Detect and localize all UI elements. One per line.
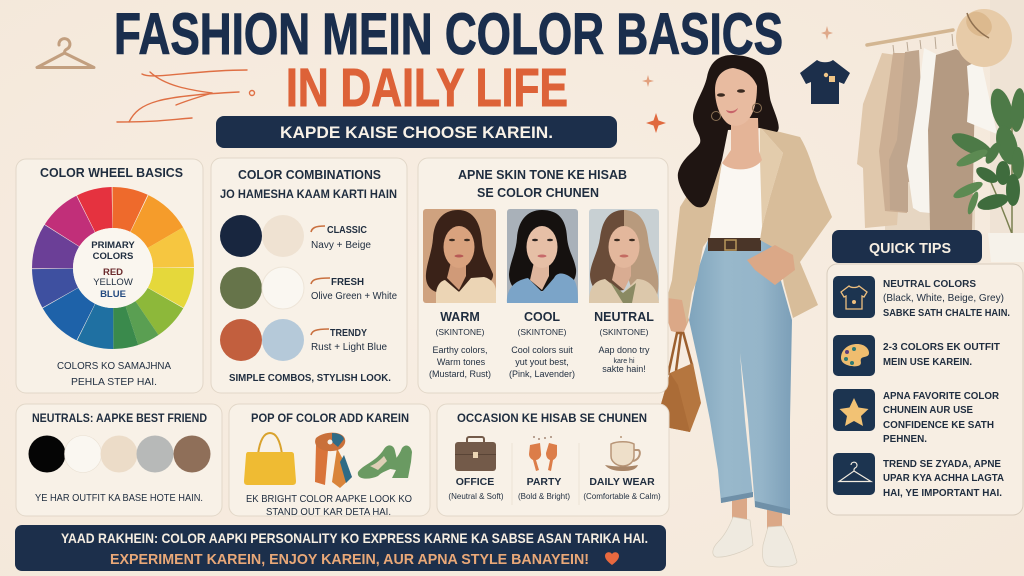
heading: SE COLOR CHUNEN (477, 185, 599, 200)
tip 3 (833, 389, 999, 445)
icon: navy t-shirt (800, 60, 850, 104)
text: cool: COOL (524, 310, 560, 324)
ankles (732, 498, 782, 532)
text: cool: yut yout best, (515, 357, 569, 367)
caption: COLORS KO SAMAJHNA (57, 360, 171, 372)
caption: PEHLA STEP HAI. (71, 376, 157, 388)
portrait: warm (423, 209, 496, 303)
labels: party: PARTY (527, 476, 561, 488)
labels: office: OFFICE (456, 476, 494, 488)
text: warm: (SKINTONE) (436, 327, 485, 337)
panel: neutrals (16, 404, 222, 516)
swatches: trendy: Rust + Light Blue (311, 342, 387, 353)
heading: JO HAMESHA KAAM KARTI HAIN (220, 187, 397, 201)
text: cool: (Pink, Lavender) (509, 369, 575, 379)
shoes (713, 517, 797, 567)
quick tips heading (832, 230, 982, 263)
swatches: fresh: FRESH (331, 276, 364, 288)
neutral swatches (28, 436, 210, 472)
tip 3: CONFIDENCE KE SATH (883, 419, 994, 431)
tip 2: MEIN USE KAREIN. (883, 356, 972, 368)
wheel centre label (73, 228, 153, 308)
bottom banner (15, 525, 666, 571)
caption: YE HAR OUTFIT KA BASE HOTE HAIN. (35, 493, 203, 504)
tip 1 (833, 276, 1010, 319)
white top (710, 160, 763, 238)
tip 1: (Black, White, Beige, Grey) (883, 292, 1004, 304)
text: neutral (594, 310, 654, 374)
swatches: trendy: TRENDY (330, 327, 367, 339)
text: neutral: Aap dono try (598, 345, 650, 355)
text: warm: (Mustard, Rust) (429, 369, 491, 379)
bottom banner: YAAD RAKHEIN: COLOR AAPKI PERSONALITY KO EXPRESS KARNE KA SABSE ASAN TARIKA HAI. (61, 530, 648, 546)
title (114, 2, 783, 118)
tip 1: NEUTRAL COLORS (883, 278, 976, 290)
neck (722, 118, 762, 169)
wheel centre label: PRIMARY (91, 240, 135, 251)
subtitle banner (216, 116, 617, 148)
icon: patterned scarf (315, 433, 352, 488)
wheel centre label: COLORS (93, 251, 133, 262)
text: neutral: (SKINTONE) (600, 327, 649, 337)
eyes and smile (717, 89, 745, 113)
heading: COLOR COMBINATIONS (238, 168, 381, 182)
title: FASHION MEIN COLOR BASICS (114, 2, 783, 67)
wheel centre label: RED (103, 267, 123, 278)
bottom banner: EXPERIMENT KAREIN, ENJOY KAREIN, AUR APNA STYLE BANAYEIN! (110, 551, 589, 568)
icon: heart (605, 552, 619, 565)
swatches: classic: Navy + Beige (311, 240, 371, 251)
earrings (712, 104, 762, 120)
panel: skin tone (418, 158, 668, 393)
text: warm: Warm tones (437, 357, 486, 367)
tip 2: 2-3 COLORS EK OUTFIT (883, 341, 1001, 353)
swatches: trendy (220, 319, 387, 361)
heading: APNE SKIN TONE KE HISAB (458, 167, 627, 182)
tip 4: TREND SE ZYADA, APNE (883, 458, 1001, 470)
icon: orange swoosh lines (117, 70, 254, 122)
heading (220, 168, 397, 201)
labels: daily wear: (Comfortable & Calm) (583, 492, 661, 501)
heading: COLOR WHEEL BASICS (40, 165, 183, 180)
icon: briefcase (455, 437, 496, 471)
blazer right (760, 127, 832, 318)
wheel centre label: BLUE (100, 289, 126, 300)
labels: party: (Bold & Bright) (518, 492, 570, 501)
illustration: potted plant (949, 86, 1024, 262)
heading: OCCASION KE HISAB SE CHUNEN (457, 411, 647, 425)
icon: coffee cup (605, 436, 640, 471)
text: neutral: sakte hain! (602, 364, 646, 374)
panel: color wheel basics (16, 159, 203, 393)
face (715, 68, 757, 126)
subtitle banner: KAPDE KAISE CHOOSE KAREIN. (280, 123, 553, 142)
bag (655, 332, 701, 432)
tip 1: SABKE SATH CHALTE HAIN. (883, 307, 1010, 319)
tip 4 (833, 453, 1004, 499)
panel: quick tips (827, 264, 1023, 515)
tip 3: PEHNEN. (883, 433, 927, 445)
chart: color wheel (52, 208, 174, 328)
quick tips heading: QUICK TIPS (869, 240, 951, 257)
right hand (747, 245, 795, 285)
text: warm (429, 310, 491, 379)
blazer left (667, 163, 722, 325)
wheel centre label: YELLOW (93, 277, 133, 288)
labels: daily wear: DAILY WEAR (589, 476, 655, 488)
illustration: woman in beige blazer and jeans (655, 55, 832, 567)
illustration: clothing rack (857, 30, 997, 232)
jeans (689, 240, 792, 515)
title: IN DAILY LIFE (286, 58, 568, 118)
belt (708, 238, 761, 251)
panel: occasion (437, 404, 669, 516)
icon: green heels (358, 445, 412, 479)
icon: champagne glasses (529, 436, 557, 471)
heading: POP OF COLOR ADD KAREIN (251, 411, 409, 425)
heading: NEUTRALS: AAPKE BEST FRIEND (32, 411, 207, 425)
labels: office (448, 476, 504, 501)
text: neutral: NEUTRAL (594, 310, 654, 324)
tip 3: CHUNEIN AUR USE (883, 404, 973, 416)
text: cool (509, 310, 575, 379)
caption: SIMPLE COMBOS, STYLISH LOOK. (229, 372, 391, 384)
portrait: cool (507, 209, 578, 303)
text: warm: Earthy colors, (432, 345, 488, 355)
tip 2 (833, 335, 1001, 376)
labels: office: (Neutral & Soft) (448, 492, 504, 501)
panel: color combinations (211, 158, 407, 393)
caption: STAND OUT KAR DETA HAI. (266, 507, 391, 518)
tip 4: UPAR KYA ACHHA LAGTA (883, 472, 1004, 484)
tip 3: APNA FAVORITE COLOR (883, 390, 999, 402)
portrait: neutral (589, 209, 659, 303)
icon: straw hat (956, 7, 1012, 67)
hair (678, 55, 779, 207)
tip 4: HAI, YE IMPORTANT HAI. (883, 487, 1002, 499)
swatches: classic: CLASSIC (327, 224, 367, 236)
panel: pop of color (229, 404, 430, 518)
icon: yellow handbag (244, 433, 296, 485)
labels: party (518, 476, 570, 501)
caption (57, 360, 171, 388)
caption (246, 494, 412, 518)
swatches: fresh (220, 267, 397, 309)
text: warm: WARM (440, 310, 480, 324)
heading (458, 167, 627, 200)
swatches: classic (220, 215, 371, 257)
text: neutral: kare hi (613, 358, 635, 365)
icon: hanger (37, 39, 94, 68)
swatches: fresh: Olive Green + White (311, 291, 397, 302)
text: cool: (SKINTONE) (518, 327, 567, 337)
labels: daily wear (583, 476, 661, 501)
icon: sparkles (642, 26, 833, 133)
caption: EK BRIGHT COLOR AAPKE LOOK KO (246, 494, 412, 505)
text: cool: Cool colors suit (511, 345, 573, 355)
left hand (666, 296, 689, 334)
